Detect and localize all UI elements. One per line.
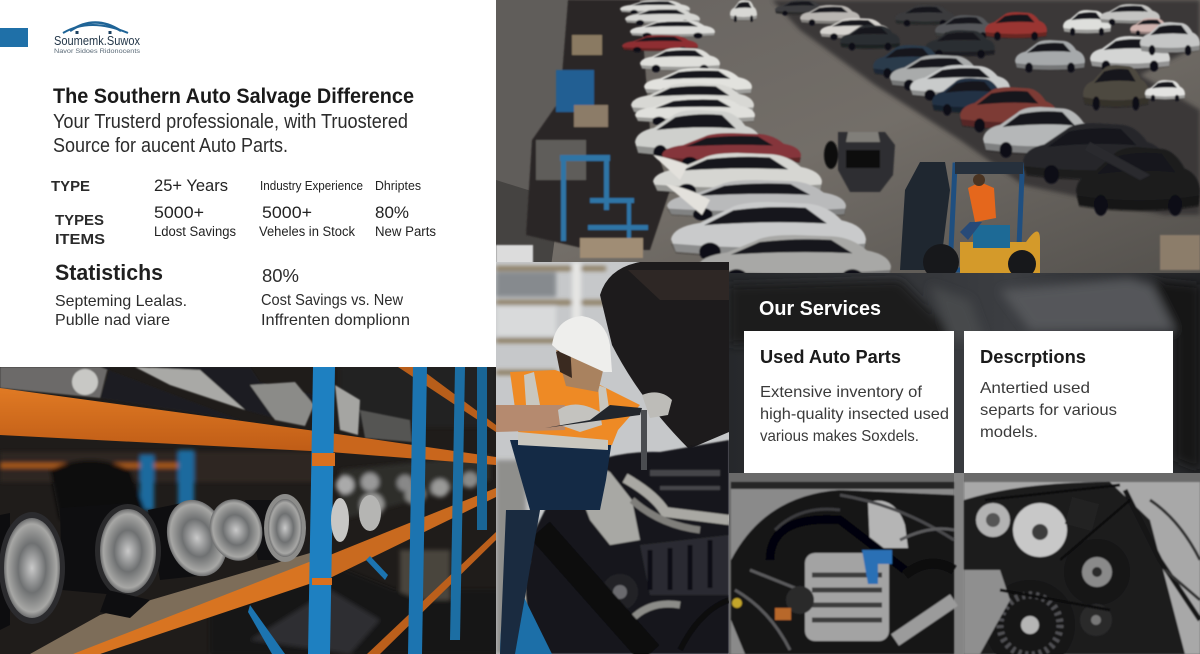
- icon: car arc: [63, 22, 128, 34]
- card body text: separts for various: [980, 402, 1117, 419]
- stat: vehicles in stock: [259, 204, 355, 239]
- salvage racks and parts piles: [496, 0, 670, 270]
- stat: new parts: [375, 204, 436, 239]
- card heading: Descrptions: [980, 347, 1086, 367]
- subtitle text: [53, 111, 408, 157]
- stat: cost savings: [154, 204, 236, 239]
- logo accent bar: [0, 28, 28, 47]
- statistic: 80 percent cost savings: 80%: [262, 266, 299, 286]
- heading: statistics: Statistichs: [55, 260, 163, 285]
- orange shelf beams: [0, 388, 330, 452]
- open car hood: [600, 262, 729, 449]
- photo: car salvage yard with forklift: [496, 0, 1200, 285]
- right rows of cars: [775, 0, 1200, 270]
- engine photo right: [964, 482, 1200, 654]
- card body text: Extensive inventory of: [760, 384, 923, 401]
- photo: shelves of headlamps: [0, 367, 500, 654]
- headlamps row: [0, 492, 381, 630]
- heading: our services: Our Services: [759, 298, 881, 320]
- row: types items: [55, 212, 105, 248]
- left row of cars: [620, 0, 891, 285]
- photo: mechanic working on engine: [496, 262, 729, 654]
- stat: new parts: New Parts: [375, 224, 436, 239]
- stat: cost savings: Ldost Savings: [154, 224, 236, 239]
- logo tagline: Navor Sidoes Ridonocents: [54, 48, 141, 55]
- row: types items: ITEMS: [55, 231, 105, 248]
- statistic: 80 percent cost savings: [261, 266, 410, 329]
- row: types items: TYPES: [55, 212, 104, 229]
- logo: southern auto salvage: [54, 22, 141, 55]
- card: used auto parts: [744, 331, 954, 473]
- engine photo left: [731, 482, 954, 654]
- card: descriptions: [964, 331, 1173, 473]
- background panel: white intro area: [0, 0, 496, 368]
- heading: the southern auto salvage difference: The Southern Auto Salvage Difference: [53, 85, 414, 108]
- row: type: TYPE: [51, 178, 90, 195]
- stat: new parts: 80%: [375, 204, 409, 222]
- card body text: models.: [980, 424, 1038, 441]
- engine bay: [515, 440, 729, 654]
- subtitle text: Your Trusterd professionale, with Truostered: [53, 111, 408, 133]
- card heading: Used Auto Parts: [760, 347, 901, 367]
- stat: years: 25+ Years: [154, 177, 228, 195]
- card body text: Antertied used: [980, 380, 1090, 397]
- blue rack uprights: [308, 367, 335, 654]
- small utility cart: [824, 132, 895, 192]
- card body text: [760, 384, 949, 445]
- statistic: 80 percent cost savings: Inffrenten domplionn: [261, 312, 410, 329]
- stat: vehicles in stock: 5000+: [262, 204, 312, 222]
- statistics text left: Publle nad viare: [55, 312, 170, 329]
- subtitle text: Source for aucent Auto Parts.: [53, 135, 288, 157]
- column label: industry experience: Industry Experience: [260, 179, 363, 193]
- stats table: [51, 177, 436, 248]
- panel: our services dark backdrop: [729, 273, 1200, 654]
- card body text: various makes Soxdels.: [760, 428, 919, 445]
- column label: dhriptes: Dhriptes: [375, 179, 421, 193]
- stat: vehicles in stock: Veheles in Stock: [259, 224, 355, 239]
- statistics text left: Septeming Lealas.: [55, 293, 187, 310]
- mechanic figure: [496, 316, 672, 654]
- shadow backdrop behind right rows: [772, 0, 1200, 215]
- top shelf headlamps: [0, 367, 412, 442]
- forklift with driver: [900, 162, 1040, 280]
- logo wordmark: Soumemk.Suwox: [54, 33, 140, 48]
- card body text: high-quality insected used: [760, 406, 949, 423]
- statistics text left: [55, 293, 187, 329]
- blue car fender: [500, 598, 552, 654]
- card body text: [980, 380, 1117, 441]
- statistic: 80 percent cost savings: Cost Savings vs. New: [261, 292, 403, 309]
- stat: cost savings: 5000+: [154, 204, 204, 222]
- wooden shelf: [30, 553, 327, 654]
